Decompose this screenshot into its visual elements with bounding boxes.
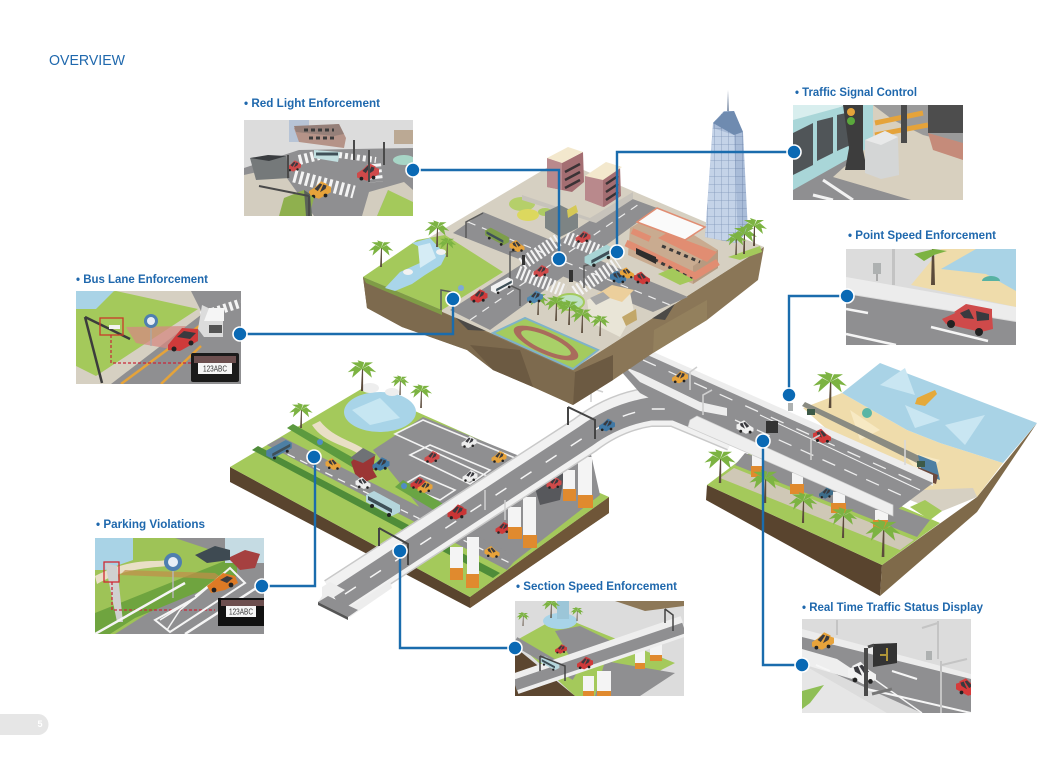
sports field [493, 318, 598, 369]
title: OVERVIEW [49, 52, 126, 69]
photo: variable message sign [802, 619, 971, 713]
glass tower [727, 90, 729, 112]
bridge pillars [450, 457, 593, 588]
corner house and plaza [556, 294, 584, 310]
right island palms [704, 372, 901, 557]
photo: bus lane camera view [76, 291, 241, 384]
connector: red light enforcement [406, 163, 566, 266]
photo: bus lane camera view: 123ABC [203, 364, 227, 374]
heading: parking violations: • Parking Violations [96, 517, 205, 531]
crosswalks [518, 237, 618, 292]
signal poles [441, 213, 598, 310]
photo: parking camera view: 123ABC [229, 608, 253, 616]
heading: red light enforcement: • Red Light Enforcement [244, 96, 380, 110]
panel: real time traffic status display [802, 600, 983, 713]
connector: traffic signal control [610, 145, 801, 259]
city vehicles [485, 228, 509, 246]
roads [450, 197, 657, 330]
photo: speed camera and red suv [846, 249, 1016, 345]
parking island [230, 383, 609, 608]
apartment blocks [547, 152, 584, 192]
heading: traffic signal control: • Traffic Signal Control [795, 85, 917, 99]
panel: red light enforcement [244, 96, 415, 216]
panel: bus lane enforcement [76, 272, 241, 384]
heading: point speed enforcement: • Point Speed Enforcement [848, 228, 996, 242]
heading: section speed enforcement: • Section Speed Enforcement [516, 579, 677, 593]
elevated highway [620, 346, 933, 516]
photo: signal and controller cabinet [793, 105, 963, 200]
connector: bus lane enforcement [233, 292, 460, 341]
heading: bus lane enforcement: • Bus Lane Enforcement [76, 272, 208, 286]
parking island objects [266, 360, 562, 558]
panel: section speed enforcement [515, 579, 684, 696]
island rock base [363, 247, 764, 405]
panel: parking violations [95, 517, 264, 634]
large hotel building [628, 212, 718, 284]
heading: real time traffic status display: • Real Time Traffic Status Display [802, 600, 983, 614]
right island base [706, 363, 1037, 596]
connector: real time traffic status display [756, 434, 809, 672]
page number [0, 714, 48, 735]
floating city island [363, 90, 767, 405]
photo: intersection scene [244, 120, 413, 216]
connector: section speed enforcement [393, 544, 522, 655]
bridge vehicles and gantries [379, 388, 615, 565]
page number: 5 [37, 719, 43, 729]
curved ramp bridge [318, 407, 735, 620]
photo: parking camera view [95, 538, 264, 634]
back block with gardens [509, 197, 535, 211]
panel: traffic signal control [793, 85, 963, 200]
lawn and river [363, 235, 503, 310]
panel: point speed enforcement [846, 228, 1016, 345]
photo: overpass overview [515, 601, 684, 696]
tower garden palms [728, 246, 762, 260]
right island pillars [751, 453, 888, 529]
connector: point speed enforcement [782, 289, 854, 402]
connector: parking violations [255, 450, 321, 593]
island surface [363, 160, 764, 369]
